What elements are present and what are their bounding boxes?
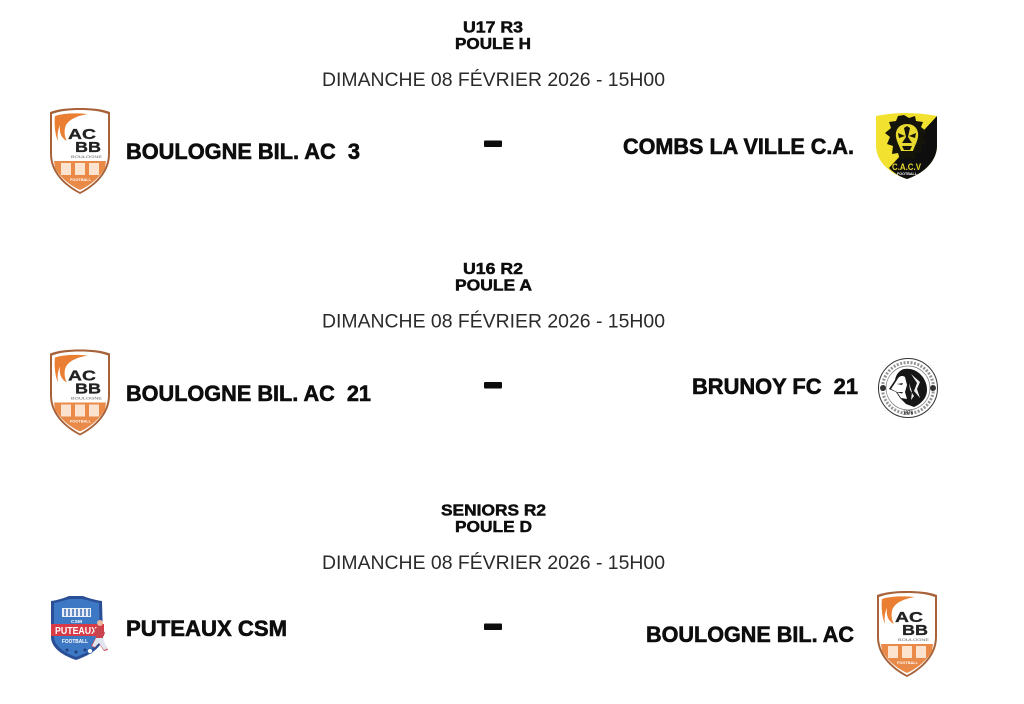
icon: Puteaux CSM crest: CSM [71,619,82,624]
date and time: DIMANCHE 08 FÉVRIER 2026 - 15H00 [322,70,665,91]
icon: Brunoy FC crest [878,358,938,418]
panel: match U16 R2 [50,261,938,436]
icon: ACBB crest: BOULOGNE [898,637,929,642]
icon: ACBB crest: FOOTBALL [70,418,92,424]
icon: ACBB crest: AC [68,368,96,384]
icon: Puteaux CSM crest: FOOTBALL [62,639,88,645]
icon: ACBB crest [877,591,937,677]
home team name: BOULOGNE BIL. AC 3 [126,139,360,164]
icon: ACBB crest: AC [68,126,96,143]
icon: ACBB crest: BOULOGNE [71,154,102,159]
icon: ACBB crest: BB [75,139,101,156]
icon: Puteaux CSM crest: PUTEAUX [55,625,97,637]
heading: Seniors R2: SENIORS R2 [441,502,546,520]
heading: Poule D: POULE D [455,519,532,536]
icon: ACBB crest: BOULOGNE [71,396,102,400]
heading: Poule H: POULE H [455,36,531,53]
icon: ACBB crest: BB [902,622,928,639]
away team name: COMBS LA VILLE C.A. [623,134,854,159]
heading: U17 R3: U17 R3 [463,20,523,36]
panel: match U17 R3 [50,20,937,194]
home team name: PUTEAUX CSM [126,616,287,641]
away team name: BRUNOY FC 21 [692,374,858,399]
icon: ACBB crest: FOOTBALL [897,660,919,665]
icon: CACV crest [876,113,937,179]
score dash [484,382,502,388]
icon: CACV crest: C.A.C.V [892,162,921,172]
panel: match Seniors R2 [51,502,937,677]
score dash [484,624,502,630]
home team name: BOULOGNE BIL. AC 21 [126,381,371,406]
icon: Puteaux CSM crest [51,596,108,660]
date and time: DIMANCHE 08 FÉVRIER 2026 - 15H00 [322,312,665,332]
icon: ACBB crest [50,350,110,436]
icon: ACBB crest [50,108,110,194]
icon: Brunoy FC crest: 1976 [903,410,913,416]
away team name: BOULOGNE BIL. AC [646,622,854,647]
icon: ACBB crest: FOOTBALL [70,177,92,182]
heading: Poule A: POULE A [455,278,532,294]
icon: ACBB crest: BB [75,380,101,398]
score dash [484,140,502,147]
icon: CACV crest: FOOTBALL [897,171,918,176]
date and time: DIMANCHE 08 FÉVRIER 2026 - 15H00 [322,553,665,574]
icon: ACBB crest: AC [895,609,923,626]
heading: U16 R2: U16 R2 [463,261,523,278]
